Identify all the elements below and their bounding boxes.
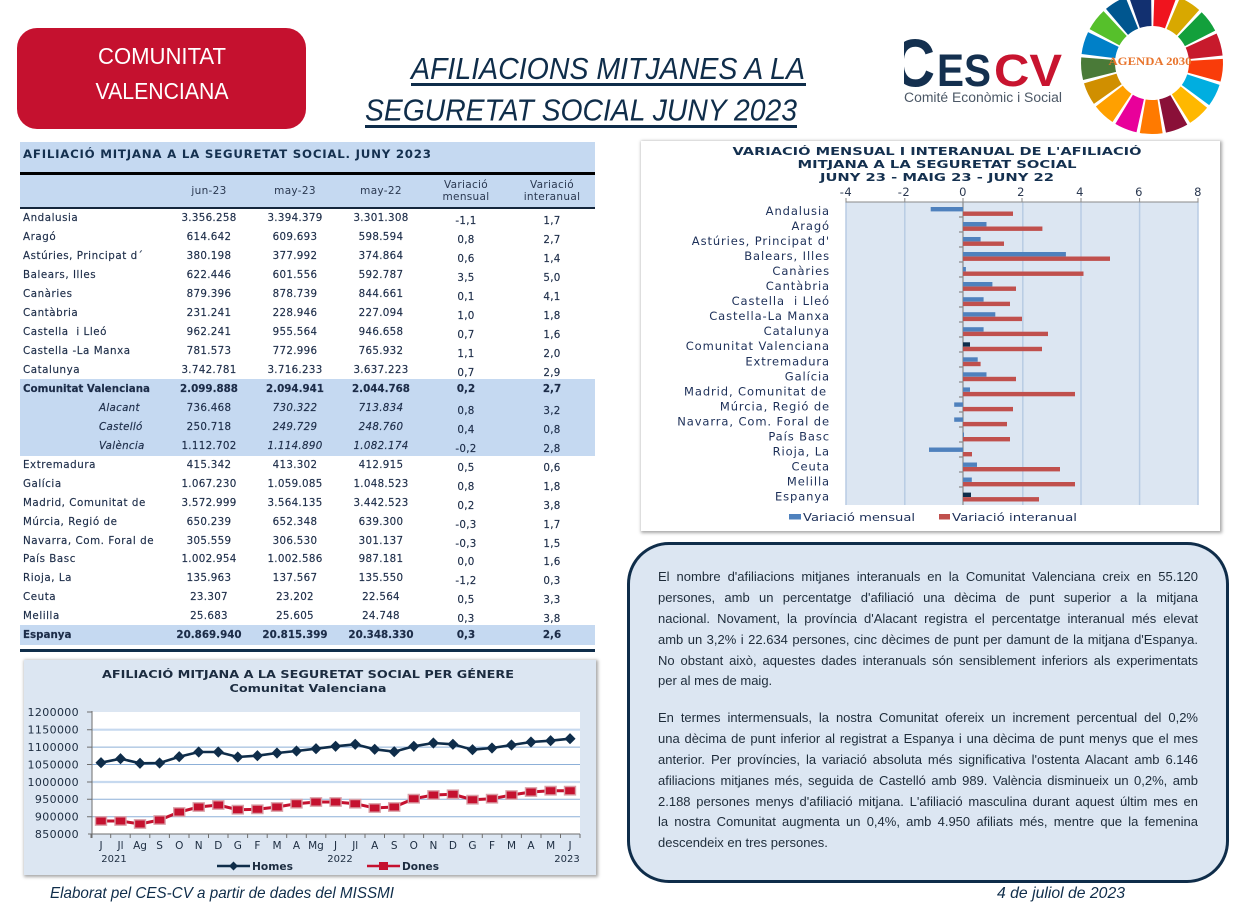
chart title: VARIACIÓ MENSUAL I INTERANUAL DE L'AFILIACIÓ <box>732 145 1142 158</box>
legend: Homes and Dones <box>217 861 439 873</box>
table column headers: may-22 <box>360 185 402 197</box>
row: Castella i Lleó <box>23 326 561 340</box>
y axis labels: 1100000 <box>28 741 79 754</box>
x axis labels: Mg <box>308 840 324 852</box>
row: Andalusia <box>23 212 561 226</box>
row: Extremadura <box>23 458 561 474</box>
row: Rioja: 135.550 <box>359 572 403 584</box>
row: Navarra: 1,5 <box>543 538 561 550</box>
row: Castelló: 0,4 <box>457 424 475 436</box>
row: Astúries: Astúries, Principat d´ <box>23 250 143 262</box>
x axis labels: Ag <box>133 840 147 852</box>
row: Andalusia: 3.394.379 <box>267 212 323 224</box>
row: Alacant: 730.322 <box>273 402 317 414</box>
category labels: Cantàbria <box>766 279 830 293</box>
badge: Comunitat Valenciana <box>17 28 306 129</box>
badge: Comunitat Valenciana: VALENCIANA <box>96 78 229 104</box>
row: Alacant: 713.834 <box>359 402 403 414</box>
paragraph 1: nacional. Novament, la província d'Alacant registra el percentatge interanual més elevat <box>658 611 1198 626</box>
category labels: Espanya <box>775 490 830 504</box>
row: Castelló <box>99 420 561 436</box>
row: Madrid: 0,2 <box>457 500 475 512</box>
panel: line chart frame <box>24 660 596 875</box>
x axis labels: D <box>449 840 457 852</box>
row: Cantàbria: 227.094 <box>359 306 403 318</box>
table heading: AFILIACIÓ MITJANA A LA SEGURETAT SOCIAL. JUNY 2023 <box>23 147 432 161</box>
row: Espanya: 20.869.940 <box>176 628 242 640</box>
row: Ceuta <box>23 590 561 606</box>
row: Comunitat Valenciana: Comunitat Valenciana <box>23 382 150 394</box>
category labels: Ceuta <box>792 460 830 474</box>
x axis labels: 2021 <box>101 854 127 865</box>
paragraph 2: En termes intermensuals, la nostra Comunitat ofereix un increment percentual del 0,2% <box>658 710 1198 725</box>
y axis labels <box>28 706 79 841</box>
row: País Basc: País Basc <box>23 552 76 564</box>
row: Melilla: 3,8 <box>543 612 561 624</box>
row: Galícia: 1,8 <box>543 480 561 492</box>
x axis labels: O <box>175 840 183 852</box>
row: Alacant: 736.468 <box>187 402 231 414</box>
row: Andalusia: 1,7 <box>543 214 561 226</box>
row: Melilla: 25.683 <box>190 610 228 622</box>
row: Canàries: 879.396 <box>187 288 231 300</box>
row: Castella-La Manxa: 1,1 <box>457 348 475 360</box>
row: Extremadura: 0,6 <box>543 462 561 474</box>
row: Canàries <box>23 288 561 302</box>
row: Castella i Lleó: Castella i Lleó <box>23 326 107 338</box>
row: Melilla: 25.605 <box>276 610 314 622</box>
row: Balears: 5,0 <box>543 272 561 284</box>
row: Castella i Lleó: 1,6 <box>543 328 561 340</box>
series: Homes <box>96 734 575 768</box>
x axis labels: J <box>98 840 103 852</box>
row: Castella i Lleó: 955.564 <box>273 326 317 338</box>
legend: Homes and Dones: Homes <box>252 861 293 873</box>
row: Ceuta: Ceuta <box>23 590 56 602</box>
row: Castelló: 0,8 <box>543 424 561 436</box>
row: País Basc: 1,6 <box>543 556 561 568</box>
row: Balears <box>23 268 561 284</box>
row: Melilla: 24.748 <box>362 610 400 622</box>
row: Rioja: 137.567 <box>273 572 317 584</box>
x axis labels: M <box>272 840 282 852</box>
row: Catalunya: 3.716.233 <box>267 364 323 376</box>
row: Castella-La Manxa <box>23 344 561 360</box>
row: Astúries: 1,4 <box>543 252 561 264</box>
row: Galícia: Galícia <box>23 478 62 490</box>
paragraph 2: 2.188 persones menys d'afiliació mitjana. L'afiliació masculina durant aquest últim mes en <box>658 794 1198 809</box>
x axis labels: J <box>567 840 572 852</box>
y axis labels: 1050000 <box>28 758 79 772</box>
row: País Basc <box>23 552 561 568</box>
row: Cantàbria: 231.241 <box>187 306 231 318</box>
x axis labels: F <box>254 840 260 852</box>
row: Espanya: 2,6 <box>543 628 561 640</box>
category labels: Castella i Lleó <box>732 294 830 308</box>
bar chart: monthly and annual variation <box>677 145 1202 524</box>
x axis labels: F <box>489 840 495 852</box>
line chart title: AFILIACIÓ MITJANA A LA SEGURETAT SOCIAL PER GÉNERE <box>102 668 514 681</box>
row: Aragó: Aragó <box>23 230 56 242</box>
category labels: Extremadura <box>745 354 830 368</box>
y axis labels: 1000000 <box>28 776 79 789</box>
bars: variació interanual <box>963 212 1110 502</box>
category labels: Galícia <box>785 369 830 383</box>
category labels: Rioja, La <box>773 444 830 458</box>
category labels: Aragó <box>792 219 830 233</box>
category labels: Andalusia <box>766 204 830 218</box>
row: Ceuta: 3,3 <box>543 594 561 606</box>
row: Astúries: 0,6 <box>457 252 475 264</box>
line chart title <box>102 668 514 695</box>
row: Canàries: 878.739 <box>273 288 317 300</box>
source note: Elaborat pel CES-CV a partir de dades del MISSMI <box>50 885 395 902</box>
row: Castella i Lleó: 946.658 <box>359 326 403 338</box>
category labels: País Basc <box>768 430 830 444</box>
x axis labels: 2 <box>1017 185 1025 199</box>
x axis labels: S <box>156 840 163 852</box>
x axis labels: M <box>507 840 516 852</box>
row: Balears: 592.787 <box>359 268 403 280</box>
row: Madrid <box>23 496 561 512</box>
row: Múrcia: -0,3 <box>455 518 477 530</box>
row: Madrid: 3.572.999 <box>181 496 237 508</box>
row: Aragó: 609.693 <box>273 230 317 242</box>
title: AFILIACIONS MITJANES A LA <box>409 51 805 86</box>
row: Extremadura: 413.302 <box>273 458 317 470</box>
row: Catalunya: Catalunya <box>23 364 80 376</box>
row: Cantàbria <box>23 306 561 322</box>
x axis labels: 0 <box>959 185 967 199</box>
row: Comunitat Valenciana: 2.044.768 <box>352 382 410 394</box>
row: Aragó: 598.594 <box>359 230 403 242</box>
row: Rioja: Rioja, La <box>23 572 72 584</box>
row: Melilla: Melilla <box>23 610 60 622</box>
category labels: Comunitat Valenciana <box>686 339 830 353</box>
row: Melilla <box>23 610 561 624</box>
x axis labels: N <box>195 840 203 852</box>
row: Andalusia: Andalusia <box>23 212 78 224</box>
row: Galícia: 0,8 <box>457 480 475 492</box>
row: Navarra <box>23 534 561 550</box>
row: Castella-La Manxa: 765.932 <box>359 344 403 356</box>
row: Madrid: 3.564.135 <box>267 496 323 508</box>
row: Navarra: -0,3 <box>455 538 477 550</box>
table column headers: jun-23 <box>191 185 227 197</box>
category labels: Melilla <box>787 474 830 488</box>
row: Alacant <box>98 402 561 416</box>
category labels: Canàries <box>772 264 830 278</box>
paragraph 2: la nostra Comunitat augmenta un 0,4%, amb 4.950 afiliats més, mentre que la femenina <box>658 814 1198 829</box>
x axis labels: -4 <box>840 185 852 199</box>
row: Múrcia: 639.300 <box>359 516 403 528</box>
row: Astúries: 377.992 <box>273 250 317 262</box>
row: Castella-La Manxa: 781.573 <box>187 344 231 356</box>
row: Andalusia: -1,1 <box>455 214 477 226</box>
row: Castella i Lleó: 0,7 <box>457 328 475 340</box>
chart title <box>732 145 1142 184</box>
row: Galícia: 1.059.085 <box>267 478 323 490</box>
x axis labels: A <box>293 840 301 852</box>
row: País Basc: 987.181 <box>359 552 403 564</box>
paragraph 1: El nombre d'afiliacions mitjanes interanuals en la Comunitat Valenciana creix en 55.120 <box>658 569 1198 584</box>
row: Extremadura: 415.342 <box>187 458 231 470</box>
table column headers: mensual <box>443 191 489 203</box>
row: Rioja: 0,3 <box>543 574 561 586</box>
chart title: JUNY 23 - MAIG 23 - JUNY 22 <box>819 171 1054 184</box>
row: Catalunya: 3.742.781 <box>181 364 237 376</box>
row: Espanya: 20.348.330 <box>348 628 414 640</box>
table column headers <box>191 179 580 203</box>
x axis labels: 2023 <box>554 854 580 865</box>
x axis labels: -2 <box>898 185 910 199</box>
row: València: 1.114.890 <box>267 440 323 452</box>
category labels <box>677 204 830 504</box>
row: Melilla: 0,3 <box>457 612 475 624</box>
x axis labels: O <box>410 840 418 852</box>
date note: 4 de juliol de 2023 <box>997 885 1125 902</box>
legend: Variació interanual <box>952 511 1077 524</box>
row: Castelló: 250.718 <box>187 420 231 432</box>
row: Astúries <box>23 250 561 264</box>
line chart: affiliation by gender <box>28 668 580 873</box>
logo: CES-CV: Comité Econòmic i Social <box>904 90 1062 105</box>
title: SEGURETAT SOCIAL JUNY 2023 <box>365 92 797 128</box>
series: Dones <box>96 786 576 828</box>
x axis labels: 8 <box>1194 185 1202 199</box>
x axis labels: 6 <box>1135 185 1143 199</box>
row: País Basc: 1.002.586 <box>267 552 323 564</box>
legend <box>789 511 1077 524</box>
icon: Agenda 2030 wheel: AGENDA 2030 <box>1108 54 1192 68</box>
row: Ceuta: 22.564 <box>362 590 400 602</box>
x axis labels: G <box>468 840 477 852</box>
row: Aragó: 2,7 <box>543 234 561 246</box>
category labels: Catalunya <box>764 324 830 338</box>
row: Madrid: Madrid, Comunitat de <box>23 496 146 508</box>
row: Ceuta: 0,5 <box>457 594 475 606</box>
logo: CES-CV: C <box>893 26 935 102</box>
x axis labels: A <box>371 840 379 852</box>
row: Cantàbria: 1,8 <box>543 310 561 322</box>
row: Espanya: Espanya <box>23 628 71 640</box>
row: Rioja <box>23 572 561 586</box>
row: Astúries: 380.198 <box>187 250 231 262</box>
line chart title: Comunitat Valenciana <box>230 682 386 695</box>
x axis labels: J <box>333 840 337 852</box>
row: Castella-La Manxa: 772.996 <box>273 344 317 356</box>
panel: bar chart frame <box>641 141 1220 531</box>
y axis labels: 950000 <box>35 793 79 806</box>
x axis labels: 4 <box>1076 185 1084 199</box>
x axis labels <box>98 840 580 865</box>
category labels: Madrid, Comunitat de <box>684 384 827 398</box>
row: València: 1.082.174 <box>353 440 409 452</box>
x axis labels: Jl <box>351 840 358 852</box>
row: Rioja: 135.963 <box>187 572 231 584</box>
row: Madrid: 3,8 <box>543 500 561 512</box>
x axis labels: S <box>391 840 398 852</box>
paragraph 2: anterior. Per províncies, la variació absoluta més significativa l'ostenta Alacant amb 6.146 <box>658 752 1198 767</box>
row: Múrcia: 650.239 <box>187 516 231 528</box>
row: Extremadura: 412.915 <box>359 458 403 470</box>
x axis labels: A <box>527 840 535 852</box>
paragraph 1: per al mes de maig. <box>658 673 772 688</box>
row: Navarra: 306.530 <box>273 534 317 546</box>
row: Cantàbria: 1,0 <box>457 310 475 322</box>
row: Alacant: 0,8 <box>457 404 475 416</box>
row: Ceuta: 23.202 <box>276 590 314 602</box>
paragraph 2: descendeix en tres persones. <box>658 835 828 850</box>
paragraph 1: persones, amb un percentatge d'afiliació una dècima de punt superior a la mitjana <box>658 590 1198 605</box>
y axis labels: 1150000 <box>28 724 79 736</box>
row: Múrcia: 1,7 <box>543 518 561 530</box>
icon: Agenda 2030 wheel <box>1081 0 1223 134</box>
row: Aragó: 614.642 <box>187 230 231 242</box>
paragraph 2 <box>658 710 1198 850</box>
table column headers: may-23 <box>274 185 316 197</box>
row: Navarra: 305.559 <box>187 534 231 546</box>
category labels: Múrcia, Regió de <box>720 399 830 413</box>
chart title: MITJANA A LA SEGURETAT SOCIAL <box>798 158 1076 171</box>
row: Aragó <box>23 230 561 246</box>
category labels: Navarra, Com. Foral de <box>677 414 830 428</box>
paragraph 2: una dècima de punt inferior al registrat a Espanya i una dècima de punt menys que el mes <box>658 731 1198 746</box>
row: Astúries: 374.864 <box>359 250 403 262</box>
row: Galícia: 1.048.523 <box>353 478 409 490</box>
row: Canàries: 844.661 <box>359 288 403 300</box>
row: País Basc: 0,0 <box>457 556 475 568</box>
paragraph 1: No obstant això, aquestes dades interanuals són sensiblement inferiors als experimentats <box>658 653 1198 668</box>
row: Comunitat Valenciana: 2.094.941 <box>266 382 324 394</box>
row: Alacant: 3,2 <box>543 404 561 416</box>
row: Ceuta: 23.307 <box>190 590 228 602</box>
x axis labels: M <box>546 840 555 852</box>
row: València: 2,8 <box>543 442 561 454</box>
row: Múrcia <box>23 516 561 530</box>
row: Espanya <box>23 628 561 640</box>
row: València <box>99 440 561 454</box>
row: Castelló: 248.760 <box>359 420 403 432</box>
row: Comunitat Valenciana: 2,7 <box>543 382 561 394</box>
bars: variació mensual <box>929 207 1066 497</box>
row: Navarra: Navarra, Com. Foral de <box>23 534 154 546</box>
row: València: -0,2 <box>455 442 477 454</box>
x axis labels: N <box>429 840 437 852</box>
row: Navarra: 301.137 <box>359 534 403 546</box>
row: València: 1.112.702 <box>181 440 237 452</box>
row: Alacant: Alacant <box>99 402 140 414</box>
panel: data table <box>20 142 595 652</box>
row: Galícia: 1.067.230 <box>181 478 237 490</box>
row: Castelló: 249.729 <box>273 420 317 432</box>
row: Castella i Lleó: 962.241 <box>187 326 231 338</box>
y axis labels: 850000 <box>35 828 79 841</box>
row: Comunitat Valenciana: 2.099.888 <box>180 382 238 394</box>
row: Canàries: Canàries <box>23 288 73 300</box>
logo: CES-CV: ES <box>937 45 991 96</box>
row: Cantàbria: 228.946 <box>273 306 317 318</box>
title <box>365 51 806 128</box>
row: Castella-La Manxa: Castella -La Manxa <box>23 344 131 356</box>
row: Espanya: 0,3 <box>457 628 475 640</box>
y axis labels: 900000 <box>35 810 79 824</box>
row: Balears: Balears, Illes <box>23 268 96 280</box>
x axis labels <box>840 185 1202 199</box>
legend: Variació mensual <box>803 511 915 524</box>
badge: Comunitat Valenciana: COMUNITAT <box>98 43 226 69</box>
row: Comunitat Valenciana <box>23 382 561 394</box>
row: Rioja: -1,2 <box>455 574 477 586</box>
row: Balears: 622.446 <box>187 268 231 280</box>
category labels: Castella-La Manxa <box>709 309 830 323</box>
y axis labels: 1200000 <box>28 706 79 719</box>
row: Castella-La Manxa: 2,0 <box>543 348 561 360</box>
row: Catalunya <box>23 364 561 378</box>
logo: CES-CV: CV <box>994 45 1062 96</box>
row: Comunitat Valenciana: 0,2 <box>457 382 475 394</box>
row: Canàries: 0,1 <box>457 290 475 302</box>
paragraph 2: afiliacions mitjanes més, seguida de Castelló amb 989. València disminueix un 0,2%, amb <box>658 773 1198 788</box>
row: Madrid: 3.442.523 <box>353 496 409 508</box>
table column headers: interanual <box>524 191 580 203</box>
row: País Basc: 1.002.954 <box>181 552 237 564</box>
category labels: Balears, Illes <box>744 249 830 263</box>
row: Múrcia: 652.348 <box>273 516 317 528</box>
table column headers: Variació <box>530 179 574 191</box>
logo: CES-CV <box>904 39 1062 105</box>
category labels: Astúries, Principat d' <box>692 234 830 248</box>
table column headers: Variació <box>444 179 488 191</box>
row: Extremadura: Extremadura <box>23 458 96 470</box>
row: Andalusia: 3.356.258 <box>181 212 237 224</box>
row: Múrcia: Múrcia, Regió de <box>23 516 117 528</box>
row: Catalunya: 2,9 <box>543 366 561 378</box>
panel: commentary text <box>627 542 1229 883</box>
x axis labels: D <box>214 840 222 852</box>
paragraph 1: amb un 3,2% i 22.634 persones, cinc dècimes de punt per damunt de la mitjana d'Espanya. <box>658 632 1198 647</box>
legend: Homes and Dones: Dones <box>402 861 439 873</box>
row: Catalunya: 3.637.223 <box>353 364 409 376</box>
row: Espanya: 20.815.399 <box>262 628 328 640</box>
x axis labels: 2022 <box>327 854 353 865</box>
paragraph 1 <box>658 569 1198 688</box>
row: Aragó: 0,8 <box>457 234 475 246</box>
x axis labels: G <box>234 840 242 852</box>
row: Balears: 601.556 <box>273 268 317 280</box>
row: València: València <box>99 440 145 452</box>
row: Andalusia: 3.301.308 <box>353 212 409 224</box>
row: Canàries: 4,1 <box>543 290 561 302</box>
row: Cantàbria: Cantàbria <box>23 306 78 318</box>
row: Extremadura: 0,5 <box>457 462 475 474</box>
row: Castelló: Castelló <box>99 420 143 432</box>
x axis labels: Jl <box>116 840 124 852</box>
row: Catalunya: 0,7 <box>457 366 475 378</box>
row: Balears: 3,5 <box>457 272 475 284</box>
row: Galícia <box>23 478 561 492</box>
